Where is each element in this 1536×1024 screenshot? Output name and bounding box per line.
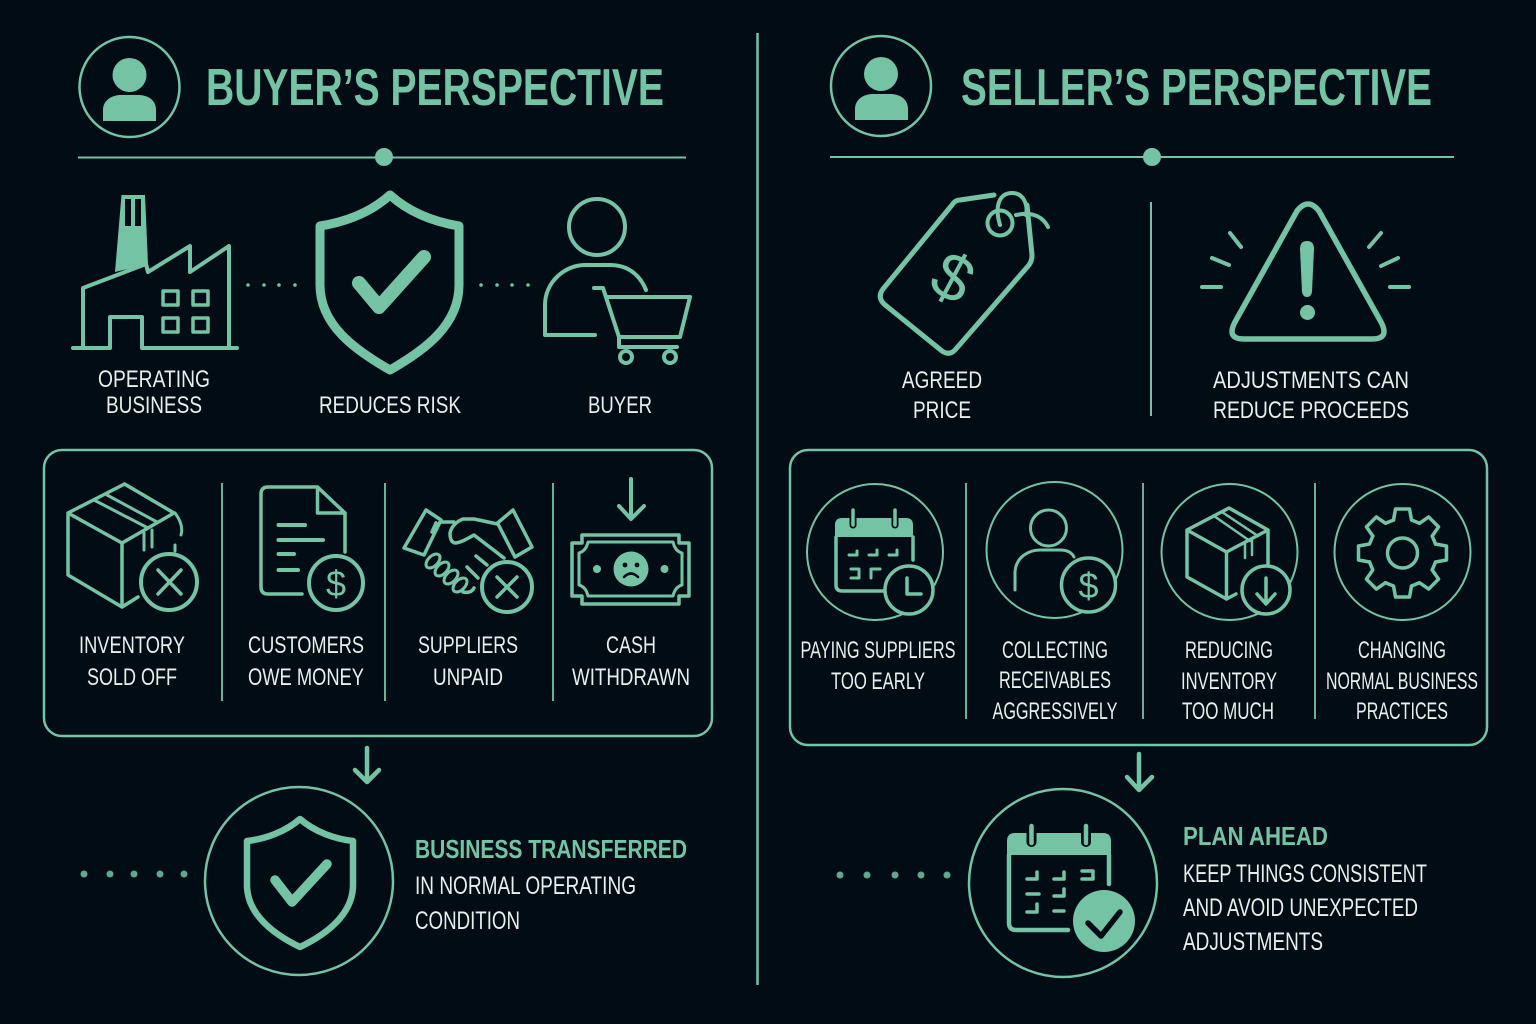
icon: price tag: $ [919,236,987,318]
label: suppliers unpaid: UNPAID [433,664,503,691]
label: customers owe money [248,632,364,691]
label: collecting receivables aggressively: COLLECTING [1002,637,1108,664]
callout: plan ahead: PLAN AHEAD [1183,821,1328,851]
label: paying suppliers too early: PAYING SUPPLIERS [800,637,956,664]
label: changing normal business practices: PRACTICES [1356,698,1448,725]
icon: box with x [68,484,197,610]
label: collecting receivables aggressively: RECEIVABLES [999,667,1111,694]
connector dots: buyer outcome [80,870,188,878]
arrow: seller panel to outcome [1127,754,1152,790]
panel: balance sheet risks [44,450,712,736]
label: cash withdrawn [572,632,690,691]
label: agreed price [902,367,982,424]
icon: circled calendar with check [969,789,1157,977]
label: reducing inventory too much: INVENTORY [1181,668,1277,695]
label: agreed price: AGREED [902,367,982,394]
label: paying suppliers too early [800,637,956,695]
icon: person with dollar coin [986,482,1122,618]
icon: warning triangle [1202,204,1409,339]
label: customers owe money: CUSTOMERS [248,632,364,659]
panel: buyer's perspective [44,37,712,975]
icon: shield with check [320,195,459,370]
callout: business transferred: CONDITION [415,907,520,935]
label: customers owe money: OWE MONEY [248,664,364,691]
label: collecting receivables aggressively: AGGRESSIVELY [992,698,1118,725]
panel: seller's perspective [790,36,1487,977]
icon: price tag [880,193,1048,353]
label: reducing inventory too much: REDUCING [1185,637,1273,664]
icon: factory [73,195,237,348]
icon: calendar with clock [807,484,943,620]
label: reduces risk: REDUCES RISK [319,392,461,419]
connector dots: shield to buyer [479,283,530,287]
label: operating business: OPERATING [98,366,210,393]
callout: business transferred: BUSINESS TRANSFERRED [415,834,687,864]
arrow: cash leaving [619,479,644,519]
icon: invoice with dollar: $ [326,563,346,604]
label: operating business [98,366,210,419]
label: adjustments can reduce proceeds: ADJUSTMENTS CAN [1213,367,1409,394]
label: changing normal business practices [1326,637,1478,725]
label: cash withdrawn: CASH [606,632,656,659]
connector dots: factory to shield [246,283,297,287]
callout: plan ahead: AND AVOID UNEXPECTED [1183,894,1418,922]
label: inventory sold off: SOLD OFF [87,664,177,691]
icon: banknote with sad face [572,535,689,604]
callout: business transferred [415,834,687,935]
callout: business transferred: IN NORMAL OPERATING [415,872,636,900]
arrow: buyer panel to outcome [355,748,379,782]
icon: gear [1334,484,1470,620]
icon: handshake with x [404,510,532,612]
icon: box with down arrow [1162,484,1298,620]
icon: buyer with cart [545,199,690,363]
label: inventory sold off: INVENTORY [79,632,185,659]
icon: buyer avatar [80,37,180,137]
callout: plan ahead [1183,821,1427,956]
panel: behaviours to avoid [790,450,1487,745]
label: suppliers unpaid: SUPPLIERS [418,632,518,659]
label: reducing inventory too much [1181,637,1277,725]
heading: buyer's perspective: BUYER’S PERSPECTIVE [206,59,664,117]
label: paying suppliers too early: TOO EARLY [831,668,925,695]
label: changing normal business practices: CHANGING [1358,637,1446,664]
label: suppliers unpaid [418,632,518,691]
label: inventory sold off [79,632,185,691]
connector dots: seller outcome [836,872,950,878]
icon: circled shield [205,787,393,975]
label: buyer: BUYER [588,392,652,419]
label: collecting receivables aggressively [992,637,1118,725]
label: reducing inventory too much: TOO MUCH [1182,698,1274,725]
callout: plan ahead: ADJUSTMENTS [1183,928,1323,956]
label: cash withdrawn: WITHDRAWN [572,664,690,691]
icon: invoice with dollar [261,487,363,610]
icon: person with dollar coin: $ [1078,565,1099,606]
label: operating business: BUSINESS [106,392,202,419]
label: adjustments can reduce proceeds: REDUCE PROCEEDS [1213,397,1409,424]
label: agreed price: PRICE [913,397,971,424]
icon: seller avatar [831,36,931,136]
header rule with dot [78,148,686,166]
callout: plan ahead: KEEP THINGS CONSISTENT [1183,860,1427,888]
header rule with dot [830,148,1454,166]
label: adjustments can reduce proceeds [1213,367,1409,424]
